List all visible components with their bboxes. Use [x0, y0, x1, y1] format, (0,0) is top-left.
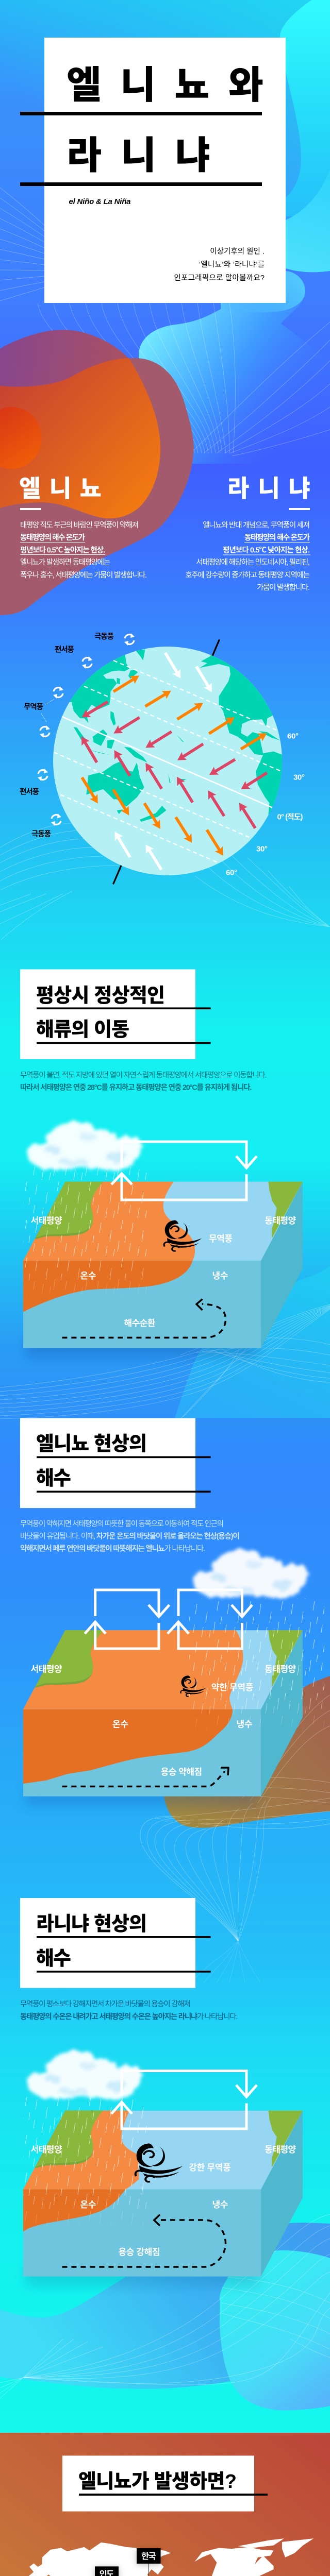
wind belt labels: 편서풍 — [55, 645, 74, 654]
wind arrows: orange — [82, 675, 267, 856]
english subtitle: el Niño & La Niña — [69, 197, 131, 206]
description: 폭우나 홍수, 서태평양에는 가뭄이 발생합니다. — [20, 571, 147, 580]
ocean block — [23, 1630, 303, 1797]
bar — [289, 508, 310, 510]
air circulation arrow: left — [85, 1590, 169, 1649]
paragraph: la nina ocean: 무역풍이 평소보다 강해지면서 차가운 바닷물의 용승이 강해져 — [20, 2000, 191, 2009]
decorative cyan blob — [220, 2250, 330, 2411]
description — [185, 521, 310, 592]
latitude labels: 60° — [287, 732, 299, 741]
top-right background tint — [0, 0, 330, 268]
diagram labels: 온수 — [80, 2200, 96, 2210]
ocean block — [23, 2111, 303, 2277]
decorative blob highlight — [222, 271, 305, 312]
diagram labels: 동태평양 — [265, 1665, 296, 1674]
diagram labels: 해수순환 — [124, 1318, 156, 1328]
diagram labels: 서태평양 — [31, 1665, 62, 1674]
rule two — [37, 1491, 211, 1493]
diagram labels: 온수 — [80, 1271, 96, 1281]
decorative cyan blob, top right — [278, 0, 330, 216]
paragraph: el nino ocean: 무역풍이 약해지면 서태평양의 따뜻한 물이 동쪽으로 이동하여 적도 인근의 — [20, 1520, 224, 1528]
rule two — [37, 1971, 211, 1973]
diagram labels — [31, 1216, 296, 1328]
world map: el nino — [20, 2538, 314, 2576]
description: 동태평양의 해수 온도가 — [20, 533, 85, 542]
cloud — [26, 1123, 142, 1170]
wind icon — [180, 1675, 206, 1697]
heading line one: 엘니뇨 현상의 — [36, 1433, 147, 1455]
rotation icons — [38, 633, 135, 826]
wind belt labels — [20, 633, 114, 839]
heading line one: 라니냐 현상의 — [36, 1913, 147, 1935]
heading: 라니냐 — [227, 475, 310, 502]
diagram: normal ocean — [23, 1123, 303, 1357]
diagram labels: 용승 강해짐 — [119, 2247, 160, 2257]
globe wind diagram — [20, 633, 305, 884]
latitude labels: 60° — [226, 869, 237, 877]
paragraph: el nino ocean: 바닷물이 유입됩니다. 이때, 차가운 온도의 바닷물이 위로 올라오는 현상(용승)이 — [20, 1532, 240, 1540]
description: 평년보다 0.5℃ 낮아지는 현상. — [223, 546, 310, 554]
paragraph: normal currents: 무역풍이 불면, 적도 지방에 있던 열이 자연스럽게 동태평양에서 서태평양으로 이동합니다. — [20, 1071, 267, 1079]
rule — [79, 2494, 268, 2496]
card — [20, 1418, 195, 1508]
box shadow — [26, 1340, 258, 1357]
box shadow — [26, 1788, 258, 1805]
diagram: la nina ocean — [23, 2052, 303, 2285]
wind arrows: pink — [81, 702, 267, 828]
diagram labels: 약한 무역풍 — [211, 1683, 253, 1692]
wind arrows: white — [114, 653, 212, 870]
ocean block — [23, 1182, 303, 1348]
paragraph: el nino ocean — [20, 1520, 240, 1553]
rule one — [37, 1456, 211, 1458]
rain — [23, 1167, 147, 1301]
section background: el nino impact — [0, 2433, 330, 2576]
heading card: el nino ocean — [20, 1418, 211, 1508]
decorative blue blob — [0, 2223, 330, 2389]
latitude lines — [54, 660, 280, 863]
globe ocean — [53, 647, 282, 875]
heading: 엘니뇨가 발생하면? — [78, 2471, 237, 2493]
paragraph: normal currents: 따라서 서태평양은 연중 28°C를 유지하고 동태평양은 연중 20°C를 유지하게 됩니다. — [20, 1083, 252, 1092]
mesh near pinch — [0, 2214, 330, 2398]
diagram labels: 온수 — [112, 1719, 128, 1729]
diagram labels: 무역풍 — [209, 1234, 233, 1244]
diagram labels: 냉수 — [236, 1719, 253, 1729]
mesh wave — [0, 1304, 330, 1422]
definition: el nino — [19, 475, 147, 580]
diagram labels: 용승 약해짐 — [161, 1767, 202, 1777]
rule two — [37, 1042, 211, 1044]
paragraph: la nina ocean: 동태평양의 수온은 내려가고 서태평양의 수온은 높아지는 라니냐가 나타납니다. — [20, 2012, 238, 2021]
card — [20, 969, 195, 1059]
title card — [20, 38, 286, 303]
diagram labels: 강한 무역풍 — [189, 2163, 231, 2173]
intro text: 이상기후의 원인 . — [210, 247, 265, 256]
decorative pale blob, lower right of cover — [139, 271, 330, 464]
title line one: 엘니뇨와 — [67, 64, 263, 106]
ocean circulation arrow — [62, 1299, 226, 1337]
wind icon — [164, 1220, 202, 1251]
diagram labels: 동태평양 — [265, 2145, 296, 2155]
description: 평년보다 0.5℃ 높아지는 현상. — [20, 546, 105, 554]
description: 호주에 강수량이 증가하고 동태평양 지역에는 — [185, 571, 310, 580]
blob: upper el nino shape — [0, 330, 160, 518]
heading line two: 해수 — [36, 1468, 71, 1489]
rule one — [20, 112, 262, 115]
ocean circulation arrow — [62, 1768, 228, 1787]
cloud — [26, 2052, 142, 2099]
description: 서태평양에 해당하는 인도네시아, 필리핀, — [196, 558, 310, 567]
decorative background band below first diagram — [175, 1266, 330, 1418]
heading line two: 해수 — [36, 1948, 71, 1970]
rain — [23, 2096, 147, 2230]
heading line two: 해류의 이동 — [36, 1019, 129, 1041]
wind belt labels: 무역풍 — [24, 703, 43, 711]
wind belt labels: 극동풍 — [94, 633, 114, 641]
air circulation arrow — [111, 2071, 257, 2129]
rule one — [37, 1007, 211, 1009]
ocean circulation arrow — [62, 2215, 226, 2267]
paragraph: la nina ocean — [20, 2000, 238, 2021]
paragraph: el nino ocean: 약해지면서 페루 연안의 바닷물이 따뜻해지는 엘니뇨가 나타납니다. — [20, 1544, 205, 1553]
rule two — [20, 182, 262, 186]
map pin: korea: 한국 — [141, 2551, 156, 2561]
continents — [69, 649, 282, 822]
description: 가뭄이 발생합니다. — [257, 583, 310, 592]
diagram labels: 냉수 — [212, 2200, 228, 2210]
wind belt labels: 극동풍 — [31, 831, 51, 839]
box shadow — [26, 2268, 258, 2285]
map pin: india — [95, 2566, 119, 2576]
heading: 엘니뇨 — [19, 475, 102, 502]
mesh lines behind globe — [0, 823, 330, 940]
latitude labels: 30° — [293, 773, 305, 782]
trade wind leader lines — [41, 700, 54, 722]
intro text — [174, 247, 265, 282]
rule one — [37, 1936, 211, 1938]
title line two: 라니냐 — [67, 134, 210, 177]
heading card: el nino impact — [62, 2455, 268, 2512]
rain — [189, 1599, 324, 1733]
definition: la nina — [185, 475, 310, 592]
diagram labels: 서태평양 — [31, 1216, 62, 1226]
latitude labels: 30° — [256, 845, 268, 853]
intro text: 인포그래픽으로 알아볼까요? — [174, 274, 265, 282]
diagram labels: 서태평양 — [31, 2145, 62, 2155]
description — [20, 521, 147, 580]
latitude labels — [226, 732, 305, 877]
latitude labels: 0° (적도) — [277, 813, 303, 821]
decorative brown blob — [164, 1676, 330, 1828]
card background — [44, 38, 286, 303]
heading line one: 평상시 정상적인 — [36, 985, 165, 1007]
air circulation arrow — [111, 1142, 257, 1200]
air circulation arrow: right — [168, 1590, 252, 1649]
diagram: el nino ocean — [23, 1550, 324, 1805]
description: 엘니뇨와 반대 개념으로, 무역풍이 세져 — [203, 521, 310, 530]
decorative pale blob, right — [278, 169, 330, 272]
heading card: la nina ocean — [20, 1898, 211, 1988]
diagram labels: 냉수 — [212, 1271, 228, 1281]
diagram labels: 동태평양 — [265, 1216, 296, 1226]
hourglass mesh — [140, 1695, 330, 1982]
diagram labels — [31, 2145, 296, 2257]
blob: orange overlap — [0, 358, 160, 518]
heading card: normal currents — [20, 969, 211, 1059]
intro text: ‘엘니뇨’와 ‘라니냐’를 — [199, 260, 265, 269]
wind icon — [136, 2143, 183, 2182]
description: 엘니뇨가 발생하면 동태평양에는 — [20, 558, 110, 567]
cloud — [192, 1550, 308, 1598]
blob: large muted red shape — [0, 358, 194, 615]
diagram labels — [31, 1665, 296, 1777]
globe axis — [113, 640, 219, 884]
blob: red-orange circle — [0, 407, 42, 469]
description: 동태평양의 해수 온도가 — [244, 533, 310, 542]
paragraph: normal currents — [20, 1071, 267, 1092]
description: 태평양 적도 부근의 바람인 무역풍이 약해져 — [20, 521, 139, 530]
card — [62, 2455, 254, 2512]
mesh lines: cover — [0, 188, 330, 456]
bar — [20, 508, 41, 510]
wind belt labels: 편서풍 — [20, 787, 39, 796]
card — [20, 1898, 195, 1988]
map pin: korea — [137, 2548, 161, 2576]
